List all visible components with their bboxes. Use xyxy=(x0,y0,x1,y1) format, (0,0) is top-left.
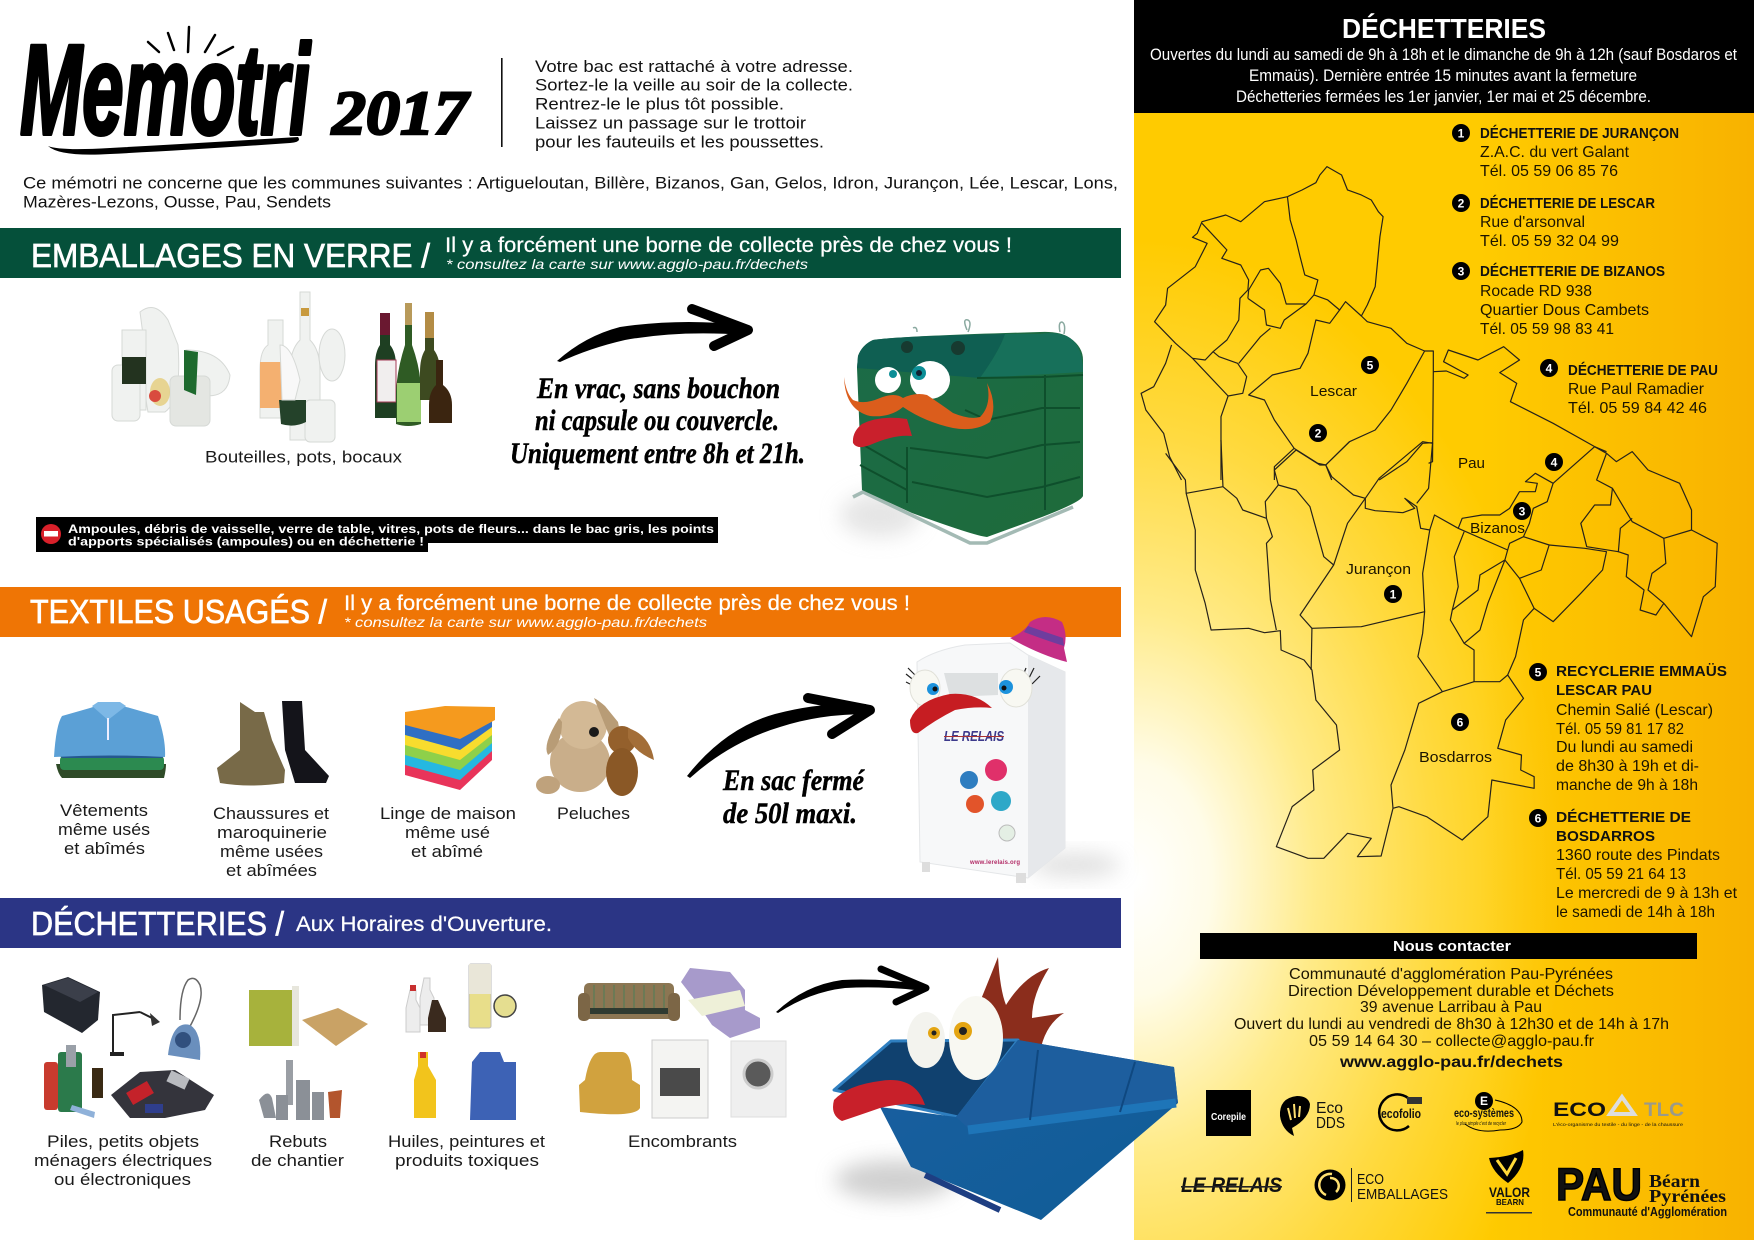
contact block: Nous contacter xyxy=(1393,938,1511,955)
photo: bulky waste xyxy=(578,968,786,1118)
map markers: 4 xyxy=(1551,456,1558,470)
sunburst rays xyxy=(148,27,233,55)
body xyxy=(917,643,1065,878)
intro separator and text: pour les fauteuils et les poussettes. xyxy=(535,134,824,152)
label: piles xyxy=(34,1132,212,1189)
banner: déchetteries: DÉCHETTERIES / xyxy=(31,905,285,942)
logo: eco-systèmes: le plus simple c'est de recycler xyxy=(1456,1121,1506,1127)
mascot: textile bin xyxy=(906,617,1120,883)
handwritten note: textile: de 50l maxi. xyxy=(723,797,857,830)
map labels: Jurançon xyxy=(1346,561,1411,578)
label: rebuts: Rebuts xyxy=(269,1132,327,1151)
label: encombrants: Encombrants xyxy=(628,1132,737,1151)
listing: déchetterie de Jurançon: Tél. 05 59 06 85 76 xyxy=(1480,163,1618,180)
contact block: 05 59 14 64 30 – collecte@agglo-pau.fr xyxy=(1309,1033,1595,1050)
contact block: www.agglo-pau.fr/dechets xyxy=(1339,1054,1563,1071)
listing: déchetterie de Jurançon: DÉCHETTERIE DE JURANÇON xyxy=(1480,125,1679,142)
label: linge de maison xyxy=(380,804,516,861)
banner: emballages en verre: Il y a forcément une borne de collecte près de chez vous ! xyxy=(445,234,1012,257)
map markers: 2 xyxy=(1315,426,1322,440)
listing: déchetterie de Bizanos: Rocade RD 938 xyxy=(1480,283,1592,300)
logo: Valor Béarn: VALOR xyxy=(1489,1184,1530,1200)
logo: EcoDDS xyxy=(1280,1096,1345,1136)
label: vêtements xyxy=(58,801,150,858)
title: Memotri logo xyxy=(20,19,311,162)
map labels xyxy=(1310,383,1525,766)
photo: glass bottles xyxy=(260,292,345,442)
stickers xyxy=(960,771,978,789)
title: year 2017: 2017 xyxy=(331,80,471,148)
label: chaussures: maroquinerie xyxy=(217,823,327,842)
listing: déchetterie de Bosdarros: 1360 route des Pindats xyxy=(1556,847,1720,864)
label: piles: Piles, petits objets xyxy=(47,1132,199,1151)
listing: déchetterie de Jurançon: 1 xyxy=(1458,126,1465,140)
lashes and eyes xyxy=(906,668,1040,686)
label: huiles xyxy=(388,1132,545,1170)
tongue xyxy=(853,418,912,447)
map markers: 1 xyxy=(1390,588,1397,602)
banner: textiles usagés: Il y a forcément une borne de collecte près de chez vous ! xyxy=(344,592,910,615)
logo on bin: LE RELAIS xyxy=(944,728,1004,745)
communes text: Ce mémotri ne concerne que les communes suivantes : Artigueloutan, Billère, Bizanos, Gan, Gelos, Idron, Jurançon, Lée, Lescar, Lons, xyxy=(23,174,1118,192)
arrow: toward skip xyxy=(776,969,926,1013)
tongue xyxy=(833,1080,925,1121)
header: déchetteries opening hours: Déchetteries fermées les 1er janvier, 1er mai et 25 décembre. xyxy=(1236,88,1651,106)
label: rebuts xyxy=(251,1132,344,1170)
listing: recyclerie Emmaüs: manche de 9h à 18h xyxy=(1556,777,1698,794)
listing: recyclerie Emmaüs: Du lundi au samedi xyxy=(1556,739,1693,756)
header: déchetteries opening hours: DÉCHETTERIES xyxy=(1342,13,1546,44)
inside xyxy=(834,1040,1018,1117)
intro separator and text: Votre bac est rattaché à votre adresse. xyxy=(535,58,853,76)
photo: plush toys xyxy=(536,698,654,796)
listing: recyclerie Emmaüs: de 8h30 à 19h et di- xyxy=(1556,758,1699,775)
underline swoosh xyxy=(48,137,299,155)
handwritten note: textile xyxy=(722,764,865,830)
map labels: Bosdarros xyxy=(1419,749,1492,766)
banner: textiles usagés: TEXTILES USAGÉS / xyxy=(30,593,328,630)
label: linge de maison: même usé xyxy=(405,823,490,842)
listing: déchetterie de Bosdarros xyxy=(1529,809,1738,921)
map markers xyxy=(1309,356,1563,731)
listing: déchetterie de Bizanos: 3 xyxy=(1458,264,1465,278)
label: peluches: Peluches xyxy=(557,804,630,823)
map labels: Lescar xyxy=(1310,383,1357,400)
label: rebuts: de chantier xyxy=(251,1151,344,1170)
banner: déchetteries: Aux Horaires d'Ouverture. xyxy=(296,913,552,936)
listing: déchetterie de Pau: 4 xyxy=(1546,362,1553,376)
photo: battery lamp vacuum and electronics xyxy=(42,977,214,1118)
listing: déchetterie de Bizanos: Quartier Dous Cambets xyxy=(1480,302,1649,319)
logo: Eco Emballages xyxy=(1314,1168,1448,1203)
header: déchetteries opening hours: Emmaüs). Dernière entrée 15 minutes avant la fermeture xyxy=(1249,67,1637,85)
label: bouteilles: Bouteilles, pots, bocaux xyxy=(205,448,403,466)
slot xyxy=(944,673,998,697)
label: chaussures: Chaussures et xyxy=(213,804,329,823)
tongue xyxy=(910,694,992,733)
logo: Le Relais: LE RELAIS xyxy=(1181,1174,1282,1197)
handwritten note: glass: ni capsule ou couvercle. xyxy=(535,404,779,437)
logo: Pau Béarn Pyrénées xyxy=(1556,1159,1727,1219)
contact block xyxy=(1200,933,1697,1071)
logo: eco-systèmes xyxy=(1454,1092,1522,1131)
communes text: Mazères-Lezons, Ousse, Pau, Sendets xyxy=(23,194,331,212)
label: chaussures: et abîmées xyxy=(226,861,317,880)
logo: Corepile xyxy=(1206,1090,1251,1136)
listing: déchetterie de Bosdarros: DÉCHETTERIE DE xyxy=(1556,809,1691,826)
listing: déchetterie de Bizanos: DÉCHETTERIE DE BIZANOS xyxy=(1480,263,1665,280)
listing: déchetterie de Jurançon: Z.A.C. du vert Galant xyxy=(1480,144,1630,161)
logo: Pau Béarn Pyrénées: Pyrénées xyxy=(1649,1186,1726,1206)
logo: Pau Béarn Pyrénées: PAU xyxy=(1556,1159,1642,1210)
banner: textiles usagés: * consultez la carte sur www.agglo-pau.fr/dechets xyxy=(344,614,707,630)
listing: déchetterie de Bosdarros: Le mercredi de 9 à 13h et xyxy=(1556,885,1738,902)
base frame xyxy=(853,492,1073,543)
listing: recyclerie Emmaüs: LESCAR PAU xyxy=(1556,682,1652,699)
listing: déchetterie de Pau: DÉCHETTERIE DE PAU xyxy=(1568,362,1718,379)
intro separator and text: Rentrez-le le plus tôt possible. xyxy=(535,96,784,114)
photo: wine bottles xyxy=(375,303,452,426)
banner: déchetteries xyxy=(0,898,1121,948)
moustache xyxy=(844,377,993,429)
label: chaussures: même usées xyxy=(220,842,323,861)
listing: déchetterie de Pau: Tél. 05 59 84 42 46 xyxy=(1568,400,1707,417)
intro separator and text: Laissez un passage sur le trottoir xyxy=(535,114,807,132)
handwritten note: glass: Uniquement entre 8h et 21h. xyxy=(510,437,805,470)
header: déchetteries opening hours xyxy=(1134,0,1754,113)
contact block: 39 avenue Larribau à Pau xyxy=(1360,999,1542,1016)
logo: Pau Béarn Pyrénées: Communauté d'Agglomération xyxy=(1568,1205,1727,1219)
banner: textiles usagés xyxy=(0,587,1121,637)
logo: Eco TLC: ECO xyxy=(1553,1100,1606,1121)
map labels: Pau xyxy=(1458,455,1485,472)
logo: ecofolio: ecofolio xyxy=(1381,1106,1421,1121)
listing: recyclerie Emmaüs xyxy=(1529,663,1727,794)
warning note: d'apports spécialisés (ampoules) ou en déchetterie ! xyxy=(68,534,424,548)
logo: EcoDDS: Eco xyxy=(1316,1100,1343,1117)
map markers: 6 xyxy=(1457,716,1464,730)
mascot: blue skip xyxy=(833,957,1178,1220)
label: vêtements: même usés xyxy=(58,820,150,839)
communes text xyxy=(23,174,1118,212)
outer shell xyxy=(880,1040,1178,1220)
listing: déchetterie de Lescar: Rue d'arsonval xyxy=(1480,214,1585,231)
handles xyxy=(913,320,1065,334)
photo: toxic products xyxy=(406,964,516,1120)
label: vêtements: et abîmés xyxy=(64,839,145,858)
eyes xyxy=(875,367,901,393)
listing: déchetterie de Bosdarros: Tél. 05 59 21 64 13 xyxy=(1556,866,1686,883)
intro separator and text: Sortez-le la veille au soir de la collecte. xyxy=(535,76,853,94)
listing: recyclerie Emmaüs: 5 xyxy=(1535,666,1542,680)
banner: emballages en verre: EMBALLAGES EN VERRE / xyxy=(31,237,431,274)
banner: emballages en verre xyxy=(0,228,1121,278)
label: chaussures xyxy=(213,804,329,880)
hair xyxy=(965,957,1064,1052)
warning note: Ampoules, débris de vaisselle, verre de table, vitres, pots de fleurs... dans le bac gris, les points xyxy=(68,522,714,536)
label: piles: ou électroniques xyxy=(54,1170,191,1189)
contact block: Communauté d'agglomération Pau-Pyrénées xyxy=(1289,966,1613,983)
listing: déchetterie de Bosdarros: le samedi de 14h à 18h xyxy=(1556,904,1715,921)
listing: déchetterie de Bizanos xyxy=(1452,262,1665,338)
contact block: Ouvert du lundi au vendredi de 8h30 à 12h30 et de 14h à 17h xyxy=(1234,1016,1669,1033)
logo: eco-systèmes: eco-systèmes xyxy=(1454,1106,1514,1120)
listing: recyclerie Emmaüs: Chemin Salié (Lescar) xyxy=(1556,702,1713,719)
label: vêtements: Vêtements xyxy=(60,801,148,820)
photo: roll wood pipes xyxy=(249,986,368,1120)
map markers: 5 xyxy=(1367,358,1374,372)
title: Memotri logo: Memotri xyxy=(20,19,311,162)
logo: Valor Béarn xyxy=(1486,1150,1532,1214)
map markers: 3 xyxy=(1519,504,1526,518)
photo: folded clothes xyxy=(54,702,166,778)
logo: eco-systèmes: E xyxy=(1480,1094,1488,1108)
banner: emballages en verre: * consultez la carte sur www.agglo-pau.fr/dechets xyxy=(446,256,808,272)
label: huiles: Huiles, peintures et xyxy=(388,1132,545,1151)
listing: recyclerie Emmaüs: RECYCLERIE EMMAÜS xyxy=(1556,663,1727,680)
handwritten note: glass xyxy=(510,372,805,470)
logo: Valor Béarn: BEARN xyxy=(1496,1197,1524,1207)
hat xyxy=(1010,617,1067,662)
map of communes xyxy=(1141,167,1717,858)
handwritten note: textile: En sac fermé xyxy=(722,764,865,797)
logo: EcoDDS: DDS xyxy=(1316,1115,1345,1132)
panel: déchetteries right column xyxy=(1134,0,1754,1240)
photo: towel stack xyxy=(405,706,495,790)
label: huiles: produits toxiques xyxy=(395,1151,539,1170)
listing: déchetterie de Pau: Rue Paul Ramadier xyxy=(1568,381,1705,398)
label: piles: ménagers électriques xyxy=(34,1151,212,1170)
warning note xyxy=(36,517,718,552)
body xyxy=(857,332,1083,537)
intro separator and text xyxy=(501,58,853,152)
listing: déchetterie de Lescar: Tél. 05 59 32 04 99 xyxy=(1480,233,1619,250)
label: linge de maison: et abîmé xyxy=(411,842,483,861)
listing: déchetterie de Pau xyxy=(1540,359,1718,417)
logo: Pau Béarn Pyrénées: Béarn xyxy=(1649,1171,1700,1191)
mascot: green glass container xyxy=(840,320,1083,543)
logo: Eco Emballages: EMBALLAGES xyxy=(1357,1186,1448,1203)
photo: boots xyxy=(217,701,329,786)
listing: déchetterie de Lescar: DÉCHETTERIE DE LESCAR xyxy=(1480,195,1655,212)
mascot: textile bin: www.lerelais.org xyxy=(969,860,1020,866)
photo: glass jars xyxy=(112,308,230,426)
label: linge de maison: Linge de maison xyxy=(380,804,516,823)
listing: déchetterie de Lescar: 2 xyxy=(1458,196,1465,210)
listing: déchetterie de Lescar xyxy=(1452,194,1655,250)
logo: Eco TLC xyxy=(1553,1097,1684,1127)
arrow: toward textile bin xyxy=(687,698,870,778)
listing: déchetterie de Bizanos: Tél. 05 59 98 83 41 xyxy=(1480,321,1614,338)
logo: Corepile: Corepile xyxy=(1211,1112,1246,1123)
handwritten note: glass: En vrac, sans bouchon xyxy=(536,372,780,405)
map labels: Bizanos xyxy=(1470,520,1525,537)
listing: déchetterie de Bosdarros: 6 xyxy=(1535,812,1542,826)
listing: recyclerie Emmaüs: Tél. 05 59 81 17 82 xyxy=(1556,721,1684,738)
eyes xyxy=(907,1012,945,1068)
logo: Eco Emballages: ECO xyxy=(1357,1171,1384,1188)
logo: Eco TLC: L'éco-organisme du textile - du linge - de la chaussure xyxy=(1553,1122,1684,1127)
arrow: toward glass container xyxy=(557,309,748,362)
logo: ecofolio xyxy=(1379,1094,1422,1130)
listing: déchetterie de Jurançon xyxy=(1452,124,1679,180)
listing: déchetterie de Bosdarros: BOSDARROS xyxy=(1556,828,1655,845)
logo: Eco TLC: TLC xyxy=(1644,1100,1684,1121)
contact block: Direction Développement durable et Déchets xyxy=(1288,983,1614,1000)
